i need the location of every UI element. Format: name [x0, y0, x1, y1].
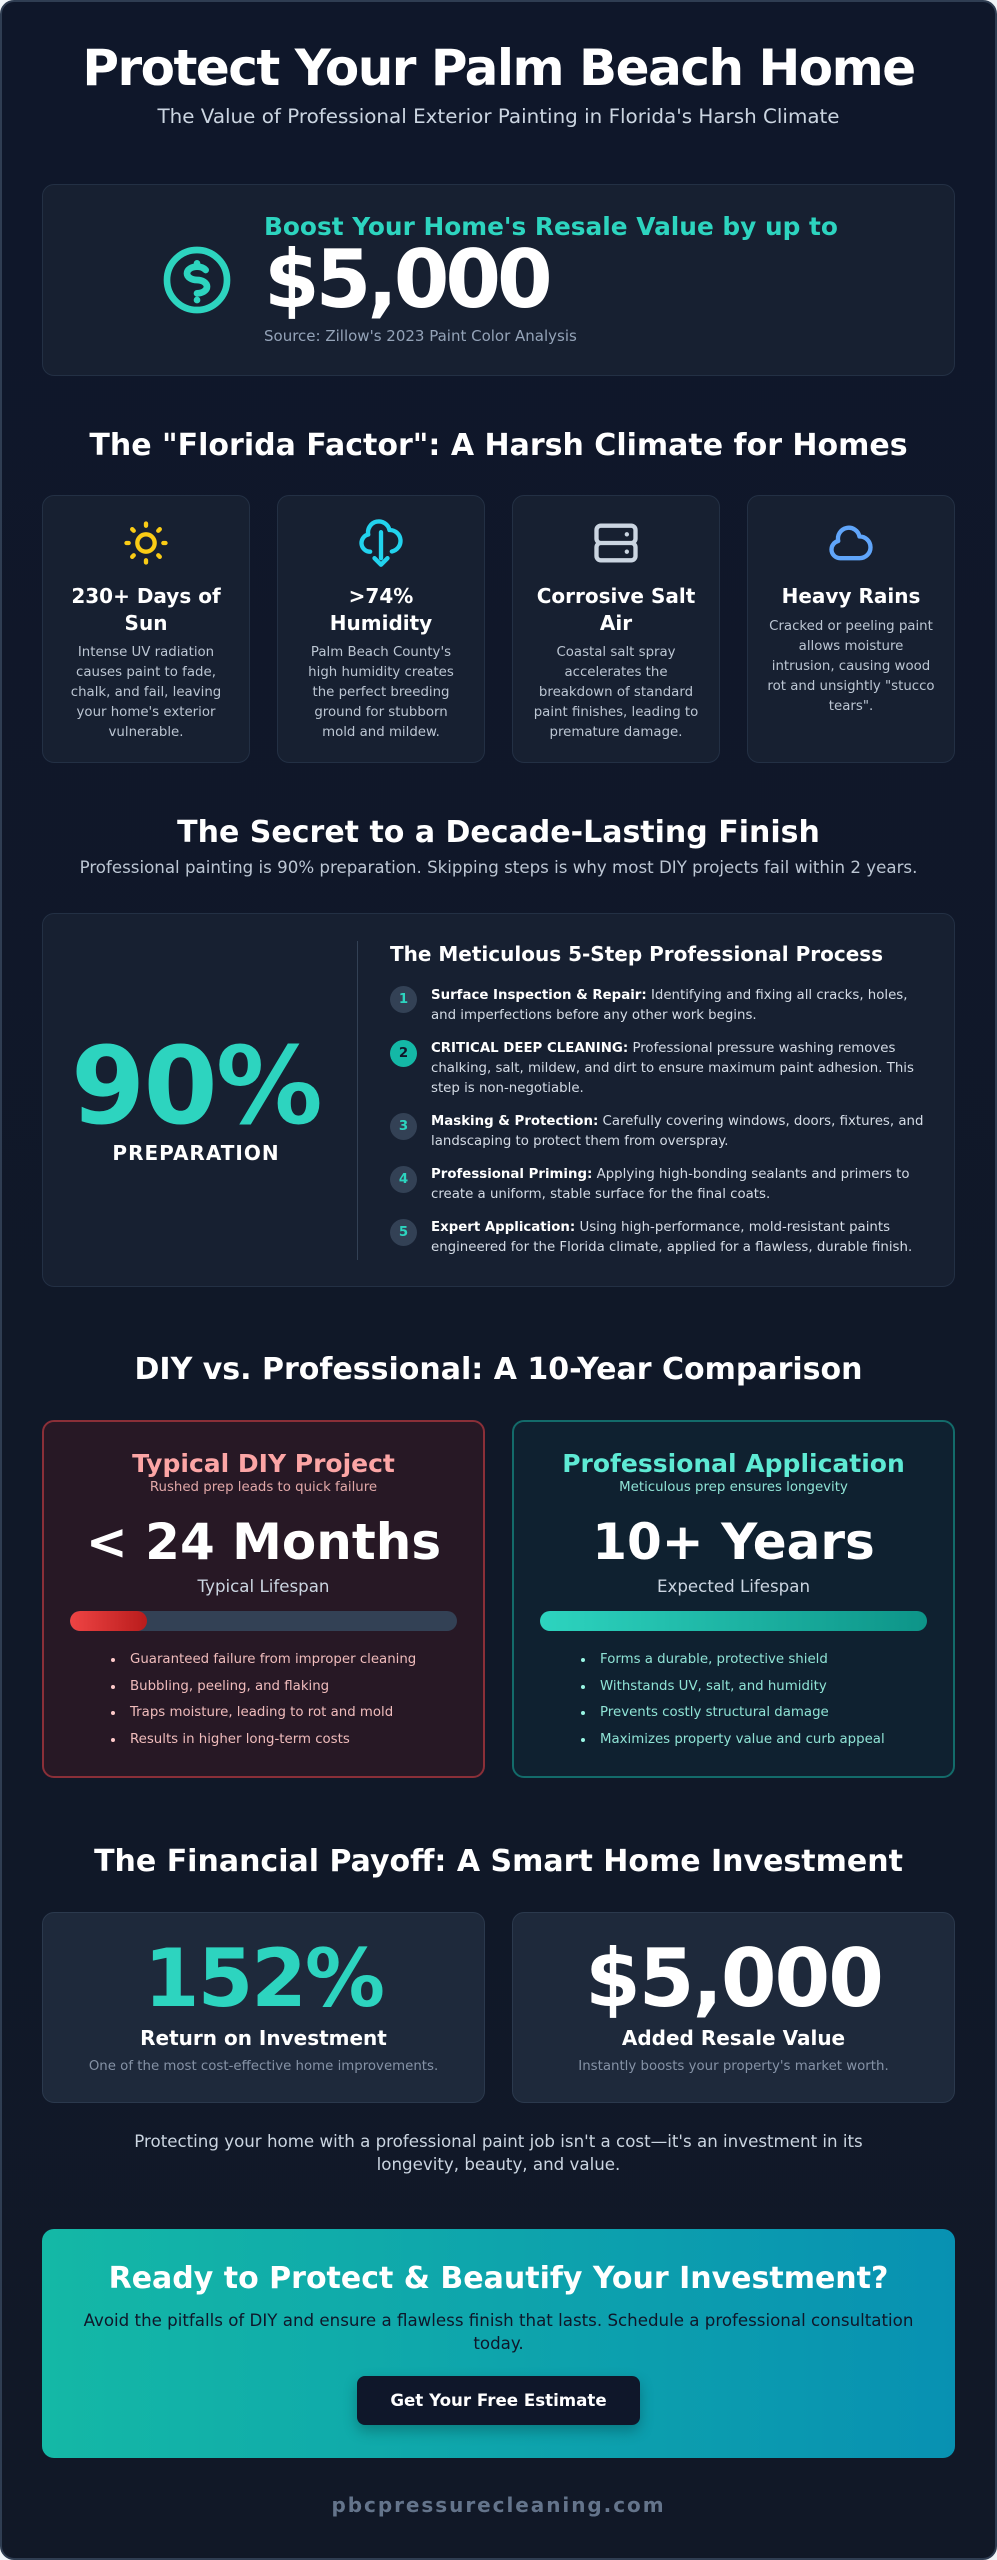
card title	[537, 584, 695, 635]
card text: the perfect breeding	[312, 685, 450, 700]
panel: sun card	[42, 495, 250, 763]
step text	[431, 988, 907, 1023]
card text: rot and unsightly "stucco	[767, 679, 935, 694]
step number: 4	[399, 1172, 408, 1187]
DIY lifespan value: < 24 Months	[86, 1513, 441, 1571]
resale value: $5,000	[585, 1932, 882, 2025]
card text: mold and mildew.	[322, 725, 440, 740]
card text: Intense UV radiation	[78, 645, 214, 660]
pro lifespan value: 10+ Years	[592, 1513, 875, 1571]
card text: Cracked or peeling paint	[769, 619, 933, 634]
step number	[390, 1040, 417, 1067]
panel: ROI	[42, 1912, 485, 2103]
ROI label: Return on Investment	[140, 2026, 387, 2050]
card text: premature damage.	[550, 725, 682, 740]
divider	[357, 941, 358, 1260]
pro bullet list: Forms a durable, protective shield	[600, 1652, 828, 1667]
card title: Air	[600, 611, 632, 635]
card text: chalk, and fail, leaving	[71, 685, 221, 700]
preparation label: PREPARATION	[112, 1141, 280, 1165]
CTA text: today.	[473, 2334, 524, 2353]
card text: Palm Beach County's	[311, 645, 451, 660]
panel: resale	[512, 1912, 955, 2103]
card text	[767, 619, 935, 714]
card text: paint finishes, leading to	[534, 705, 698, 720]
step text: chalking, salt, mildew, and dirt to ensure maximum paint adhesion. This	[431, 1061, 914, 1076]
closing statement: longevity, beauty, and value.	[377, 2155, 620, 2174]
DIY bullet list: Results in higher long-term costs	[130, 1732, 350, 1747]
resale note: Instantly boosts your property's market worth.	[578, 2059, 889, 2074]
card title	[330, 584, 432, 635]
big stat 90%: 90%	[71, 1025, 321, 1149]
panel: resale value hero	[42, 184, 955, 376]
hero value: $5,000	[264, 233, 549, 326]
card text: intrusion, causing wood	[772, 659, 930, 674]
step number	[390, 1219, 417, 1246]
step text	[431, 1167, 910, 1202]
pro lifespan bar	[540, 1611, 927, 1631]
CTA button: Get Your Free Estimate	[390, 2391, 607, 2410]
footer website: pbcpressurecleaning.com	[331, 2493, 666, 2517]
closing statement: Protecting your home with a professional paint job isn't a cost—it's an investment in its	[134, 2132, 863, 2151]
step text	[431, 1114, 923, 1149]
step text: Expert Application: Using high-performance, mold-resistant paints	[431, 1220, 890, 1235]
DIY title: Typical DIY Project	[132, 1449, 395, 1478]
step 1	[390, 986, 907, 1023]
section description: Professional painting is 90% preparation. Skipping steps is why most DIY projects fail within 2 years.	[80, 858, 917, 877]
icon: server	[594, 524, 638, 562]
card text	[534, 645, 698, 740]
resale label: Added Resale Value	[622, 2026, 845, 2050]
step text: Surface Inspection & Repair: Identifying and fixing all cracks, holes,	[431, 988, 907, 1003]
icon: dollar circle	[164, 246, 230, 314]
step number: 3	[399, 1119, 408, 1134]
icon: sun	[124, 521, 168, 565]
subtitle: The Value of Professional Exterior Painting in Florida's Harsh Climate	[157, 105, 840, 128]
hero source: Source: Zillow's 2023 Paint Color Analysis	[264, 327, 577, 345]
pro bullet list	[581, 1652, 885, 1747]
heading: Florida factor: The "Florida Factor": A Harsh Climate for Homes	[89, 428, 908, 463]
card title	[71, 584, 221, 635]
DIY bullet list: Bubbling, peeling, and flaking	[130, 1679, 329, 1694]
card text: vulnerable.	[109, 725, 183, 740]
pro bullet list: Prevents costly structural damage	[600, 1705, 829, 1720]
card title: 230+ Days of	[71, 584, 221, 608]
panel: rain card	[747, 495, 955, 763]
step 3	[390, 1113, 923, 1149]
ROI note: One of the most cost-effective home improvements.	[89, 2059, 438, 2074]
DIY subtitle: Rushed prep leads to quick failure	[150, 1480, 377, 1495]
heading: financial payoff: The Financial Payoff: A Smart Home Investment	[94, 1844, 903, 1879]
step number	[390, 1166, 417, 1193]
step text	[431, 1041, 914, 1096]
CTA button	[357, 2376, 640, 2425]
card text: high humidity creates	[308, 665, 454, 680]
DIY bullet list: Guaranteed failure from improper cleaning	[130, 1652, 416, 1667]
step 4	[390, 1166, 910, 1202]
pro bullet list: Maximizes property value and curb appeal	[600, 1732, 885, 1747]
heading: comparison: DIY vs. Professional: A 10-Year Comparison	[135, 1352, 862, 1387]
card text: causes paint to fade,	[76, 665, 216, 680]
card text: Coastal salt spray	[556, 645, 676, 660]
card text	[71, 645, 221, 740]
step text: Masking & Protection: Carefully covering windows, doors, fixtures, and	[431, 1114, 923, 1129]
CTA text: Avoid the pitfalls of DIY and ensure a flawless finish that lasts. Schedule a professional consultation	[84, 2311, 913, 2330]
step number: 2	[399, 1046, 408, 1061]
step number	[390, 1113, 417, 1140]
DIY lifespan bar	[70, 1611, 457, 1631]
step number: 1	[399, 992, 408, 1007]
CTA heading: Ready to Protect & Beautify Your Investment?	[109, 2261, 888, 2296]
step text: engineered for the Florida climate, applied for a flawless, durable finish.	[431, 1240, 912, 1255]
step text: create a uniform, stable surface for the final coats.	[431, 1187, 770, 1202]
icon: cloud	[829, 526, 873, 560]
card text: breakdown of standard	[539, 685, 693, 700]
pro title: Professional Application	[562, 1449, 905, 1478]
card text: your home's exterior	[77, 705, 215, 720]
DIY bullet list	[111, 1652, 416, 1747]
step text: CRITICAL DEEP CLEANING: Professional pressure washing removes	[431, 1041, 895, 1056]
hero heading: Boost Your Home's Resale Value by up to	[264, 212, 838, 241]
step text: Professional Priming: Applying high-bonding sealants and primers to	[431, 1167, 910, 1182]
closing statement	[134, 2132, 863, 2174]
panel: professional	[512, 1420, 955, 1778]
step number: 5	[399, 1225, 408, 1240]
title: Protect Your Palm Beach Home	[82, 39, 915, 97]
ROI value: 152%	[144, 1932, 383, 2025]
card text: accelerates the	[564, 665, 668, 680]
card text: ground for stubborn	[314, 705, 448, 720]
process heading: The Meticulous 5-Step Professional Process	[390, 942, 883, 966]
pro bullet list: Withstands UV, salt, and humidity	[600, 1679, 827, 1694]
heading: decade-lasting finish: The Secret to a Decade-Lasting Finish	[177, 815, 820, 850]
icon: cloud download	[359, 519, 403, 567]
card text	[308, 645, 454, 740]
card title: Sun	[125, 611, 167, 635]
step text	[431, 1220, 912, 1255]
step text: step is non-negotiable.	[431, 1081, 584, 1096]
card title: Humidity	[330, 611, 432, 635]
card title: Heavy Rains	[782, 584, 920, 608]
card title: Corrosive Salt	[537, 584, 695, 608]
panel: preparation process	[42, 913, 955, 1287]
DIY lifespan label: Typical Lifespan	[198, 1577, 329, 1596]
step 5	[390, 1219, 912, 1255]
card title: >74%	[349, 584, 413, 608]
pro subtitle: Meticulous prep ensures longevity	[619, 1480, 848, 1495]
panel: call to action	[42, 2229, 955, 2458]
step text: and imperfections before any other work begins.	[431, 1008, 757, 1023]
panel: humidity card	[277, 495, 485, 763]
DIY bullet list: Traps moisture, leading to rot and mold	[130, 1705, 393, 1720]
card text: allows moisture	[799, 639, 903, 654]
panel: salt air card	[512, 495, 720, 763]
panel: DIY	[42, 1420, 485, 1778]
CTA text	[84, 2311, 913, 2353]
step text: landscaping to protect them from overspray.	[431, 1134, 729, 1149]
card text: tears".	[829, 699, 873, 714]
step 2	[390, 1040, 914, 1096]
step number	[390, 986, 417, 1013]
pro lifespan label: Expected Lifespan	[657, 1577, 810, 1596]
